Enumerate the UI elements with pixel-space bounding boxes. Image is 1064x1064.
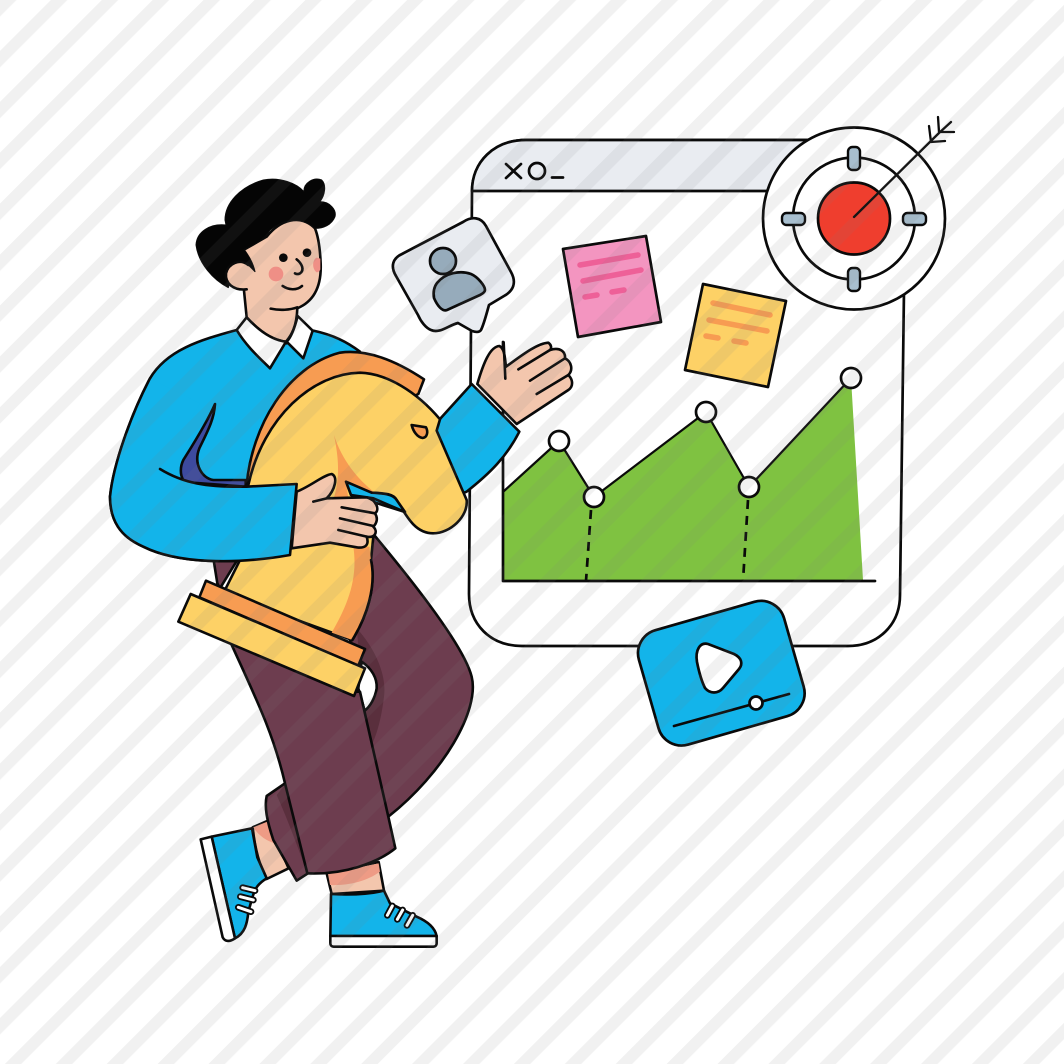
horse body [223, 373, 467, 640]
target ticks [782, 147, 926, 291]
bullseye [818, 182, 890, 254]
progress knob [750, 696, 762, 710]
window title bar [472, 140, 820, 191]
right sleeve [430, 384, 519, 495]
horse base bottom [178, 594, 365, 696]
trouser waist [213, 558, 238, 588]
back lower leg [253, 821, 289, 879]
ear [226, 262, 248, 289]
target icon [763, 117, 954, 310]
yellow sticky note [685, 284, 786, 387]
area chart [503, 342, 875, 581]
torso and horse [110, 179, 572, 696]
front leg skin shadow [328, 863, 380, 885]
chart area [504, 378, 863, 580]
horse mane [247, 352, 424, 485]
back shoe laces [238, 888, 255, 912]
front shoe [330, 891, 437, 947]
horse mouth gap [346, 482, 405, 512]
neck and face [243, 220, 321, 342]
holding hand finger lines [313, 498, 375, 537]
front trouser leg [231, 643, 395, 873]
waving hand [477, 342, 572, 424]
right cheek [313, 258, 320, 272]
gap between legs [358, 662, 377, 711]
video player card [632, 595, 810, 751]
user speech bubble [393, 218, 514, 332]
back trouser cuff [266, 783, 308, 881]
user body [434, 272, 485, 310]
nose and mouth [271, 259, 302, 310]
arrow [854, 117, 954, 217]
collar [237, 316, 313, 368]
back shoe [201, 828, 267, 941]
front shoe laces [387, 906, 413, 925]
horse jaw shading [333, 435, 375, 500]
front arm sleeve [110, 378, 297, 561]
chart axes [503, 342, 875, 581]
sweater fold shadow [181, 404, 246, 487]
window controls [506, 163, 563, 179]
horse lower outline [352, 560, 373, 640]
eyes [279, 248, 311, 262]
dashed drop lines [586, 500, 748, 581]
sweater torso [110, 330, 405, 561]
chart data points [549, 368, 861, 507]
person with chess knight [201, 530, 473, 947]
horse base top [199, 581, 365, 666]
sleeve outline [110, 378, 297, 561]
play button [697, 644, 741, 692]
trouser shadow [357, 628, 384, 745]
finger lines [504, 342, 568, 394]
back trouser leg [350, 530, 473, 817]
left cheek [269, 267, 283, 281]
front lower leg [327, 862, 384, 894]
progress bar [674, 694, 789, 726]
user head [430, 248, 456, 274]
hair [196, 179, 335, 288]
window frame [469, 140, 904, 646]
horse eye [412, 425, 427, 438]
horse lower neck band [332, 547, 373, 640]
holding hand [292, 474, 377, 548]
pink sticky note [563, 236, 661, 337]
back leg skin shadow [253, 822, 277, 844]
chart outline [504, 378, 851, 497]
